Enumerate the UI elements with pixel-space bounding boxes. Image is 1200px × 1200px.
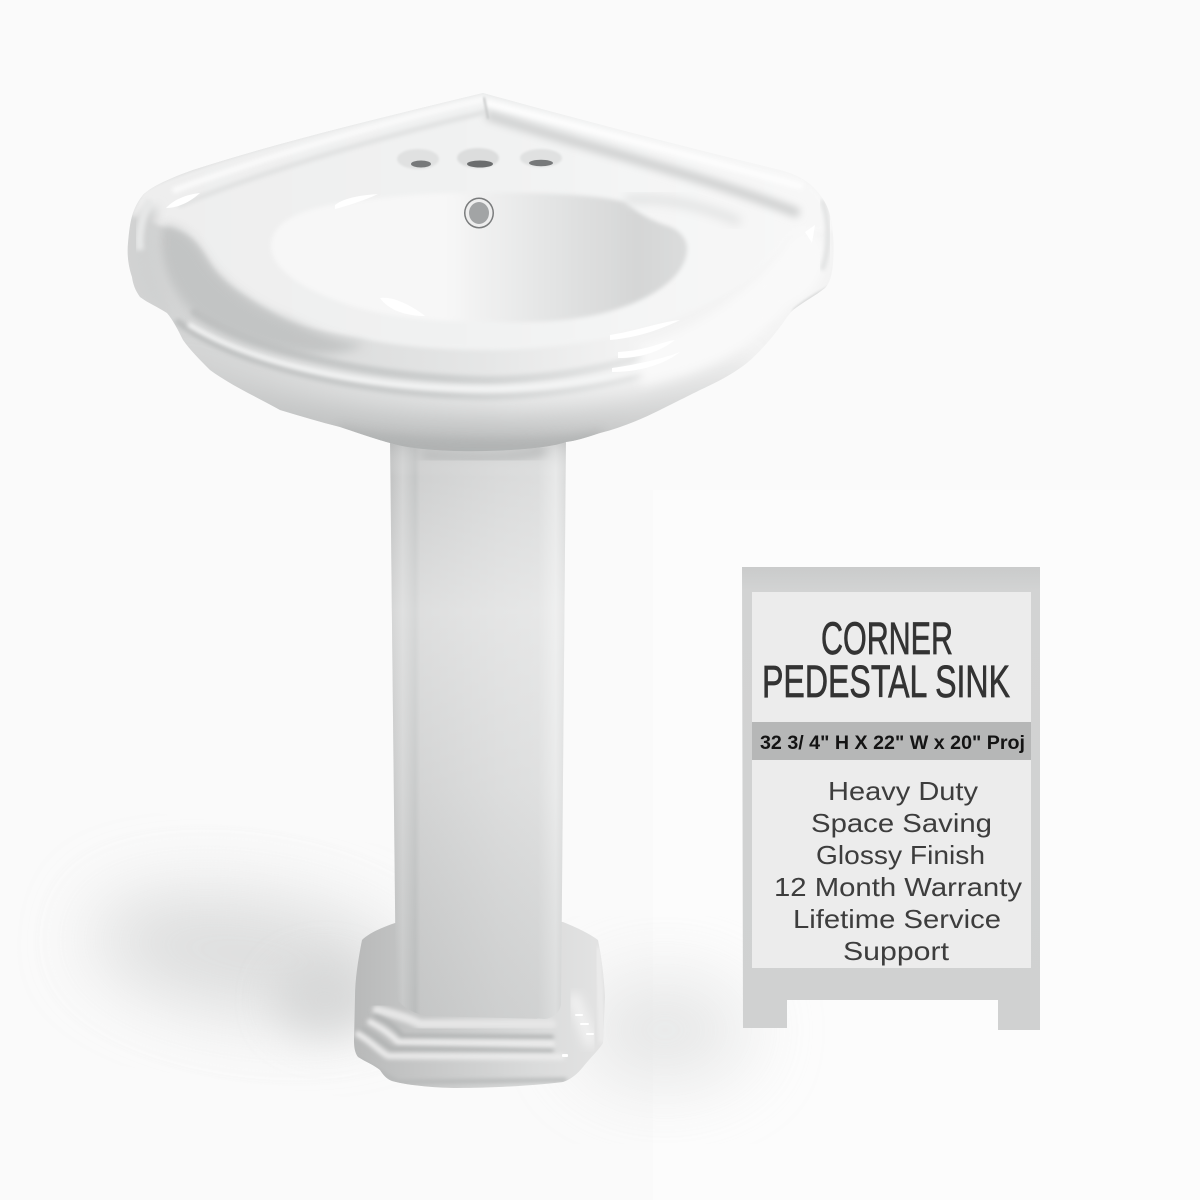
sign: a-frame board (742, 567, 1040, 1030)
feature list: 12 Month Warranty (774, 872, 1022, 902)
sign white panel (752, 592, 1031, 968)
lighter backdrop behind sign (653, 490, 1200, 1200)
back ridge (175, 98, 800, 212)
foot glints (538, 1014, 594, 1057)
feature list: Glossy Finish (816, 840, 985, 870)
title: PEDESTAL SINK (762, 656, 1010, 707)
overflow drain (464, 198, 494, 228)
title: CORNER (821, 613, 953, 664)
title (762, 613, 1010, 707)
feature list: Lifetime Service (793, 904, 1001, 934)
right front lip highlight (640, 310, 762, 381)
dimensions text: 32 3/ 4" H X 22" W x 20" Proj (760, 733, 1025, 754)
pedestal column (390, 436, 566, 1019)
glossy highlights (166, 193, 815, 372)
pedestal sink (120, 85, 840, 1095)
pedestal foot (354, 922, 605, 1088)
dimensions strip (752, 722, 1031, 760)
underside shading (230, 366, 740, 452)
right lobe shading (792, 287, 826, 310)
basin deck (132, 94, 538, 349)
rim mouldings (174, 311, 638, 400)
foot steps (358, 950, 602, 1082)
feature list: Support (843, 936, 950, 966)
floor shadows (83, 875, 750, 1082)
sign frame (742, 567, 1040, 1030)
basin bowl (271, 193, 740, 322)
feature list (774, 776, 1022, 966)
feature list: Heavy Duty (828, 776, 978, 806)
feature list: Space Saving (811, 808, 992, 838)
faucet holes (397, 148, 562, 169)
basin outer body (120, 85, 840, 470)
left lobe shading (161, 225, 365, 354)
